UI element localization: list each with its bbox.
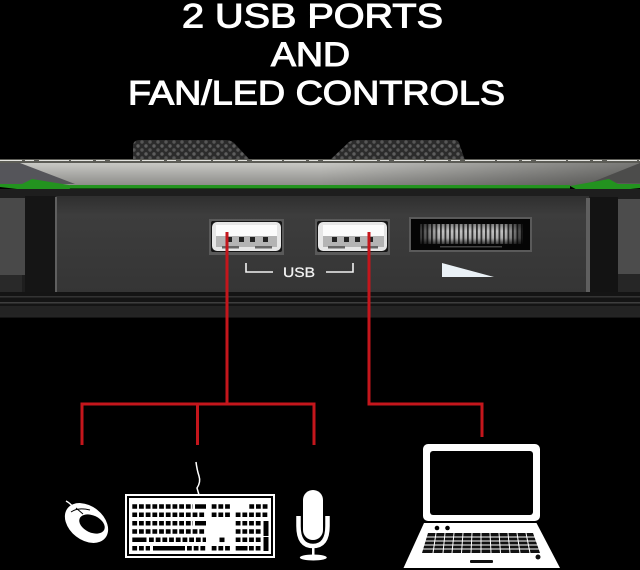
icon: microphone xyxy=(298,490,328,560)
grey top face xyxy=(0,163,640,186)
bottom rail xyxy=(0,292,640,318)
red connector: left USB to three peripherals xyxy=(82,232,314,445)
USB port left xyxy=(209,219,284,255)
USB label with brackets: USB xyxy=(283,264,315,280)
right side block xyxy=(590,197,640,292)
top edge highlight xyxy=(0,159,640,163)
title xyxy=(128,0,505,112)
icon: keyboard xyxy=(126,462,274,557)
rubber grips on top of the device xyxy=(133,140,465,160)
device: cooling pad front edge xyxy=(0,140,640,318)
left side block xyxy=(0,196,55,292)
USB port right xyxy=(315,219,390,255)
icon: mouse xyxy=(57,495,116,551)
icon: laptop xyxy=(404,444,560,568)
USB label with brackets xyxy=(246,263,353,280)
title: FAN/LED CONTROLS xyxy=(128,74,505,112)
dark front panel xyxy=(0,189,640,293)
control wheel xyxy=(409,217,532,252)
red connector: right USB to laptop xyxy=(369,232,482,437)
title: AND xyxy=(271,36,350,74)
level triangle xyxy=(442,263,494,277)
green LED strip xyxy=(0,179,640,194)
